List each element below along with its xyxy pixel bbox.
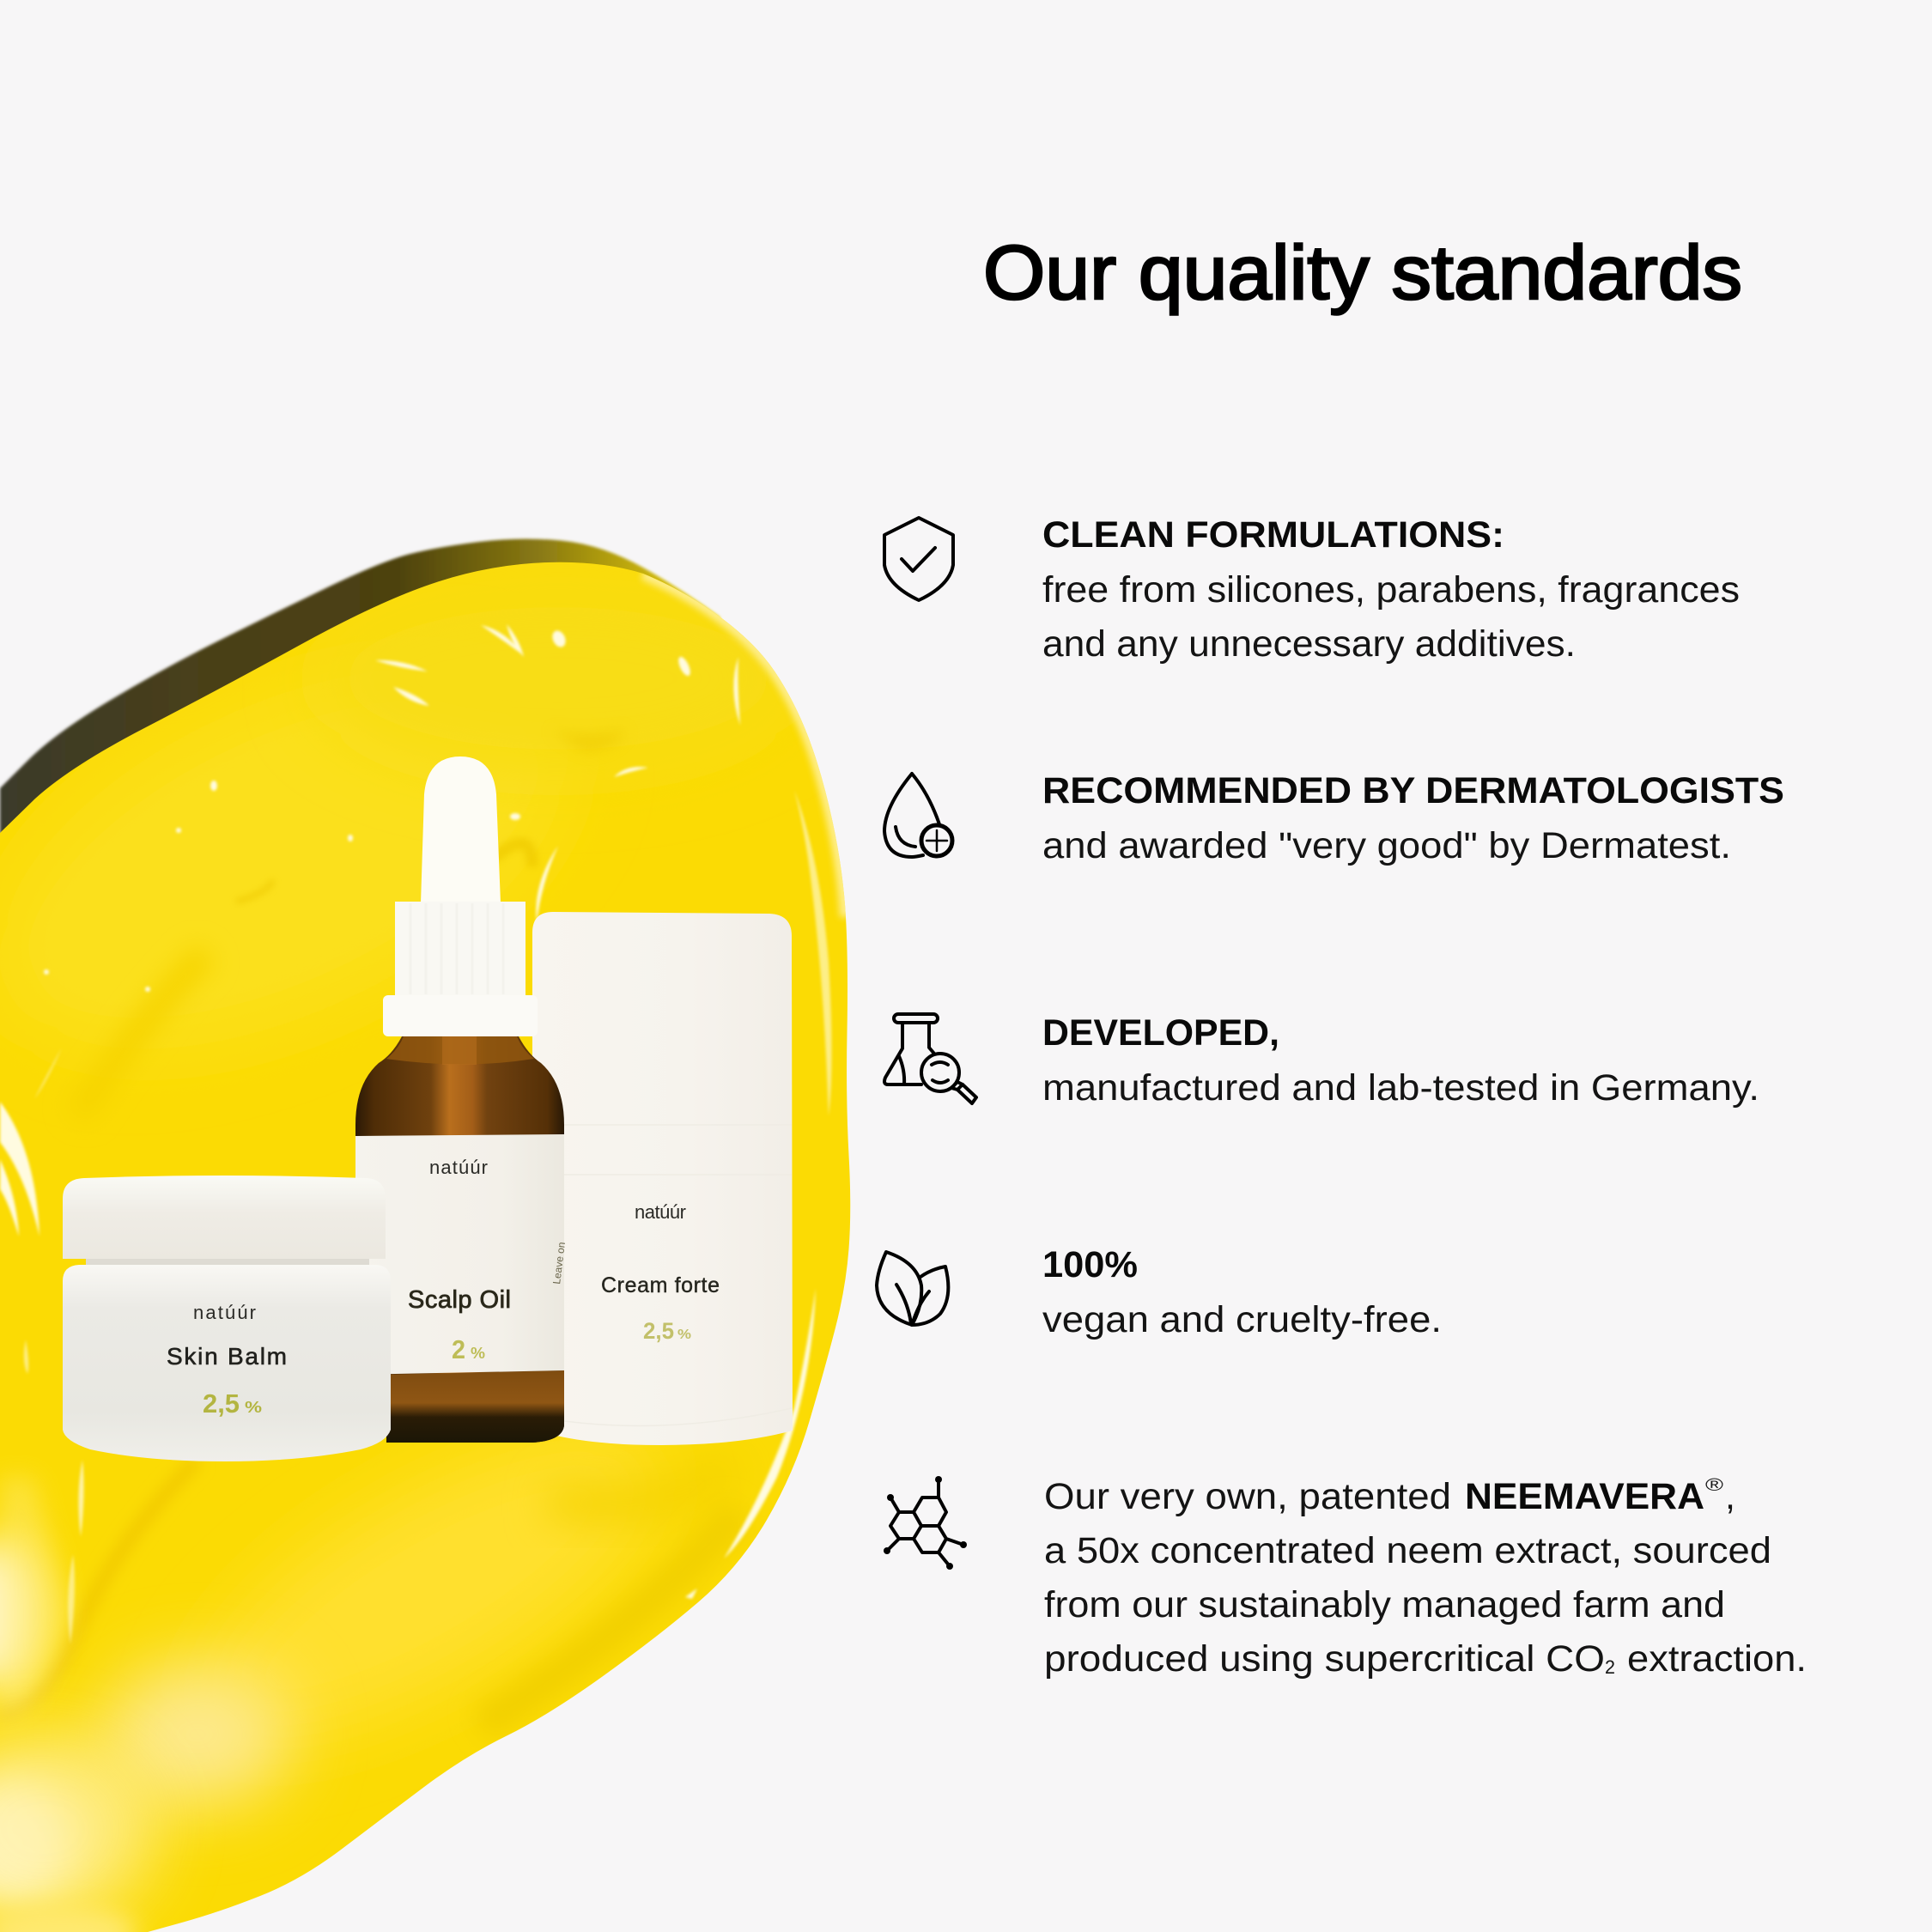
jar percentage: %: [245, 1399, 262, 1416]
cream swatch: [0, 515, 876, 1932]
body: and any unnecessary additives.: [1042, 623, 1576, 665]
amber glass: [355, 1036, 564, 1443]
title: Our quality standards: [983, 229, 1742, 315]
bottle percentage: 2: [452, 1334, 465, 1364]
heading: RECOMMENDED BY DERMATOLOGISTS: [1042, 770, 1784, 811]
item: neemavera: [1044, 1476, 1807, 1680]
lower amber: [386, 1370, 564, 1443]
line 2: a 50x concentrated neem extract, sourced: [1044, 1530, 1771, 1571]
jar percentage: [203, 1388, 262, 1419]
tube name: Cream forte: [601, 1273, 720, 1297]
icon: drop with plus: [884, 774, 952, 857]
body: and awarded "very good" by Dermatest.: [1042, 825, 1731, 866]
line 3: from our sustainably managed farm and: [1044, 1584, 1725, 1625]
tube percentage: [643, 1318, 691, 1344]
line 4: 2: [1605, 1656, 1615, 1678]
icon: shield with check: [884, 518, 953, 600]
tube percentage: 2,5: [643, 1318, 674, 1344]
line 1: [1044, 1476, 1735, 1517]
body: manufactured and lab-tested in Germany.: [1042, 1067, 1759, 1109]
swatch shadow edge: [0, 539, 721, 945]
speculars: [0, 624, 831, 1644]
item: clean formulations: [1042, 514, 1740, 665]
dropper cap: [383, 902, 538, 1036]
label: [355, 1134, 564, 1375]
line 4: extraction.: [1627, 1638, 1807, 1680]
bottle name: Scalp Oil: [408, 1286, 511, 1314]
heading: CLEAN FORMULATIONS:: [1042, 514, 1504, 556]
collar: [383, 995, 538, 1036]
pale rim: [643, 574, 846, 917]
icon: molecule: [884, 1476, 967, 1570]
product: Scalp Oil bottle: [355, 756, 568, 1443]
bottle percentage: [452, 1334, 485, 1364]
line 4: produced using supercritical CO: [1044, 1638, 1605, 1680]
item: developed: [1042, 1012, 1759, 1109]
body: free from silicones, parabens, fragrances: [1042, 569, 1740, 611]
line 1: NEEMAVERA: [1465, 1476, 1704, 1517]
jar body: [63, 1265, 391, 1461]
jar lid: [63, 1176, 386, 1259]
product: Cream forte tube: [532, 912, 793, 1445]
tube logo: natúúr: [635, 1201, 686, 1223]
swatch body: [0, 515, 876, 1932]
heading: 100%: [1042, 1244, 1138, 1285]
line 1: Our very own, patented: [1044, 1476, 1451, 1517]
neck highlight: [386, 1036, 534, 1065]
bottle logo: natúúr: [429, 1157, 488, 1178]
icon: flask with magnifier: [884, 1014, 976, 1103]
item: vegan: [1042, 1244, 1442, 1340]
icon: leaves: [877, 1252, 948, 1325]
tube percentage: %: [677, 1327, 691, 1342]
line 1: ®: [1705, 1476, 1723, 1495]
jar percentage: 2,5: [203, 1388, 240, 1419]
line 4: [1044, 1638, 1807, 1680]
bottle percentage: %: [471, 1345, 485, 1362]
jar logo: natúúr: [193, 1302, 256, 1323]
product: Skin Balm jar: [63, 1176, 391, 1461]
body: [1042, 569, 1740, 665]
dropper bulb: [421, 756, 501, 903]
line 1: ,: [1725, 1476, 1735, 1517]
heading: DEVELOPED,: [1042, 1012, 1279, 1054]
item: dermatologists: [1042, 770, 1784, 866]
jar name: Skin Balm: [167, 1343, 287, 1370]
body: vegan and cruelty-free.: [1042, 1299, 1442, 1340]
jar neck: [86, 1254, 369, 1267]
side script: Leave on: [550, 1242, 568, 1285]
